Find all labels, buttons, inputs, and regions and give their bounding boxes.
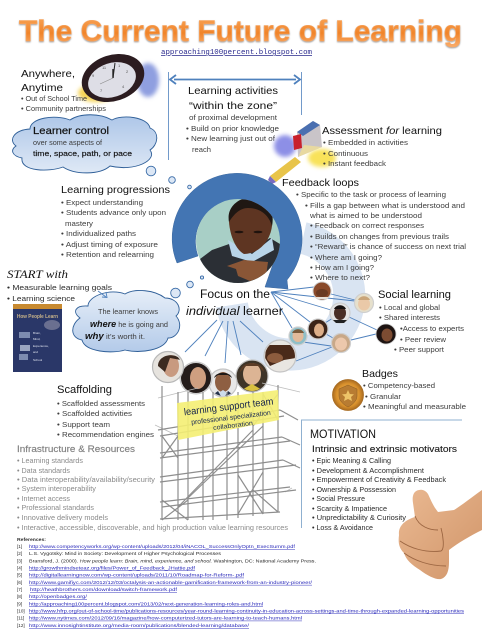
references: http://www.nytimes.com/2012/09/16/magazine/how-computerized-tutors-are-learning-to-teach-humans.html bbox=[29, 616, 302, 621]
text: social learning: •Access to experts bbox=[400, 324, 464, 333]
text: scaffolding: • Scaffolded activities bbox=[57, 409, 132, 418]
text: learning activities bbox=[186, 85, 279, 154]
references: [2] bbox=[17, 551, 22, 556]
references: [5] bbox=[17, 573, 22, 578]
text: focus on the individual learner: individual learner bbox=[186, 306, 283, 318]
text: social learning: Social learning bbox=[378, 289, 451, 301]
icon: book cover: School bbox=[33, 358, 43, 362]
text: learning activities: of proximal development bbox=[189, 113, 277, 122]
references: [11] bbox=[17, 616, 24, 621]
references: http://growthmindseteaz.org/files/Power_of_Feedback_JHattie.pdf bbox=[29, 566, 196, 570]
icon: book cover: Mind, bbox=[33, 337, 41, 341]
text: start with: START with bbox=[7, 267, 68, 281]
title: The Current Future of Learning bbox=[19, 15, 462, 48]
text: infrastructure and resources: • Internet access bbox=[17, 494, 70, 503]
references: [6] bbox=[17, 580, 22, 585]
text: learning activities: “within the zone” bbox=[189, 100, 278, 112]
references bbox=[17, 537, 465, 628]
icon: tape measure bbox=[268, 121, 336, 184]
references: http://www.innosightinstitute.org/media-room/publications/blended-learning/database/ bbox=[29, 623, 250, 628]
text: feedback loops bbox=[282, 177, 466, 282]
text: social learning bbox=[378, 289, 464, 354]
icon: clock: 11 bbox=[102, 65, 107, 70]
panel: motivation: MOTIVATION bbox=[310, 429, 376, 441]
text: infrastructure and resources bbox=[17, 444, 288, 532]
banner: learning support team bbox=[177, 390, 279, 440]
text: assessment for learning bbox=[322, 125, 442, 168]
text: badges: Badges bbox=[362, 368, 398, 380]
text: badges: • Competency-based bbox=[363, 381, 435, 390]
text: feedback loops: • Fills a gap between what is understood and bbox=[305, 201, 465, 210]
panel: motivation: • Ownership & Possession bbox=[312, 485, 396, 494]
photo: central learner bbox=[196, 197, 280, 283]
text: social learning: • Shared interests bbox=[379, 313, 440, 322]
banner: learning support team: professional specialization bbox=[191, 410, 271, 427]
text: scaffolding: • Scaffolded assessments bbox=[57, 399, 145, 408]
text: scaffolding: • Support team bbox=[57, 420, 110, 429]
text: social learning: • Local and global bbox=[379, 303, 440, 312]
text: anywhere anytime: Anytime bbox=[21, 82, 63, 94]
references: http://openbadges.org/ bbox=[29, 594, 88, 599]
icon: clock: 2 bbox=[126, 69, 129, 74]
icon: book cover: Brain, bbox=[33, 331, 41, 335]
banner: learning support team: collaboration bbox=[213, 420, 254, 432]
references: [7] bbox=[17, 587, 22, 592]
text: feedback loops: Feedback loops bbox=[282, 177, 359, 189]
icon: clock: 7 bbox=[100, 88, 103, 93]
panel: motivation: • Scarcity & Impatience bbox=[312, 504, 387, 513]
icon: badge bbox=[332, 380, 364, 410]
text: badges bbox=[362, 368, 466, 411]
cloud: learner knows: why it’s worth it. bbox=[85, 331, 145, 341]
text: assessment for learning: Assessment for learning bbox=[322, 125, 442, 137]
text: learning activities: reach bbox=[192, 145, 211, 154]
text: start with: • Learning science bbox=[7, 294, 75, 303]
text: start with bbox=[7, 267, 112, 303]
text: infrastructure and resources: • Innovative delivery models bbox=[17, 513, 108, 522]
text: anywhere anytime: • Out of School Time bbox=[21, 94, 87, 103]
text: learning progressions: • Adjust timing of exposure bbox=[61, 240, 158, 249]
text: learning activities: • Build on prior knowledge bbox=[186, 124, 279, 133]
text: anywhere anytime: Anywhere, bbox=[21, 68, 75, 80]
text: learning progressions bbox=[61, 184, 170, 259]
connector lines bbox=[185, 287, 377, 363]
text: learning progressions: mastery bbox=[65, 219, 93, 228]
references: http://www.hfrp.org/out-of-school-time/publications-resources/year-round-learning-continuity-in-education-across-settings-and-time-through-expanded-learning-opportunities bbox=[29, 608, 465, 614]
text: scaffolding: Scaffolding bbox=[57, 384, 112, 396]
references: [4] bbox=[17, 566, 22, 570]
double arrow: zone of proximal development bbox=[168, 72, 302, 160]
panel: motivation: • Development & Accomplishment bbox=[312, 466, 424, 475]
text: social learning: • Peer review bbox=[400, 335, 447, 344]
text: social learning: • Peer support bbox=[394, 345, 444, 354]
references: [3] bbox=[17, 558, 22, 563]
text: assessment for learning: • Instant feedback bbox=[323, 159, 386, 168]
text: infrastructure and resources: • Data interoperability/availability/security bbox=[17, 475, 155, 484]
text: feedback loops: • Feedback on correct responses bbox=[310, 221, 424, 230]
text: learning progressions: • Individualized paths bbox=[61, 229, 136, 238]
panel: motivation bbox=[302, 420, 462, 532]
references: http://digitallearningnow.com/wp-content/uploads/2011/10/Roadmap-for-Reform-.pdf bbox=[29, 573, 245, 578]
text: feedback loops: • “Reward” is chance of success on next trial bbox=[310, 242, 466, 251]
text: assessment for learning: • Embedded in activities bbox=[323, 138, 408, 147]
text: learning progressions: Learning progressions bbox=[61, 184, 170, 196]
references: [9] bbox=[17, 601, 22, 606]
references: Bransford, J. (2000). How people learn: Brain, mind, experience, and school. Washington, DC: National Academy Press. bbox=[29, 558, 316, 563]
cloud: learner control: over some aspects of bbox=[33, 138, 103, 147]
panel: motivation: • Epic Meaning & Calling bbox=[312, 456, 391, 465]
icon: clock bbox=[75, 46, 159, 110]
icon: book cover bbox=[13, 304, 62, 372]
text: feedback loops: what is aimed to be understood bbox=[309, 211, 422, 220]
text: infrastructure and resources: • Interactive, accessible, discoverable, and high production value learning resources bbox=[17, 523, 288, 532]
text: learning progressions: • Students advance only upon bbox=[61, 208, 166, 217]
blog url: approaching100percent.blogspot.com bbox=[161, 49, 312, 57]
text: feedback loops: • Where to next? bbox=[310, 273, 370, 282]
banner: learning support team: learning support team bbox=[183, 396, 274, 418]
cloud: learner control: time, space, path, or pace bbox=[33, 149, 132, 158]
icon: clock: 9 bbox=[92, 73, 95, 78]
text: learning activities: • New learning just out of bbox=[186, 134, 276, 143]
references: http://www.gamifiyc.com/2012/12/03/octalysis-an-actionable-gamification-framework-from-an-industry-pioneer/ bbox=[29, 580, 313, 585]
text: focus on the individual learner bbox=[186, 289, 283, 318]
text: infrastructure and resources: Infrastructure & Resources bbox=[17, 444, 136, 454]
icon: clock: 4 bbox=[122, 84, 125, 89]
panel: motivation: • Loss & Avoidance bbox=[312, 523, 373, 532]
references: [10] bbox=[17, 608, 25, 614]
references: L.S. Vygotsky: Mind in Society: Development of Higher Psychological Processes bbox=[29, 551, 222, 556]
cloud: learner knows: The learner knows bbox=[98, 307, 158, 316]
references: http://approaching100percent.blogspot.com/2013/02/next-generation-learning-roles-and.html bbox=[29, 601, 263, 606]
arrow: goals to cloud bbox=[98, 291, 107, 298]
thought bubbles: upper bbox=[146, 166, 191, 189]
scaffold structure bbox=[155, 383, 300, 520]
icon: clock: 1 bbox=[118, 63, 121, 68]
icon: thumbs up bbox=[399, 490, 482, 579]
cloud: learner control bbox=[12, 115, 157, 173]
references: [8] bbox=[17, 594, 22, 599]
text: badges: • Granular bbox=[365, 392, 402, 401]
text: infrastructure and resources: • System interoperability bbox=[17, 484, 96, 493]
icon: book cover: How People Learn bbox=[17, 314, 58, 320]
icon: book cover: Experience, bbox=[33, 344, 49, 348]
icon: book cover: and bbox=[33, 350, 38, 354]
text: feedback loops: • Where am I going? bbox=[310, 253, 382, 262]
text: infrastructure and resources: • Learning standards bbox=[17, 456, 83, 465]
cloud: learner knows: where he is going and bbox=[90, 319, 168, 329]
photos: learning support team bbox=[152, 340, 296, 398]
text: assessment for learning: • Continuous bbox=[323, 149, 368, 158]
photos: peer network bbox=[289, 282, 396, 352]
text: learning activities: Learning activities bbox=[188, 85, 278, 97]
text: scaffolding: • Recommendation engines bbox=[57, 430, 154, 439]
panel: motivation: • Empowerment of Creativity & Feedback bbox=[312, 475, 446, 484]
references: http://heathbrothers.com/download/switch-framework.pdf bbox=[30, 587, 178, 592]
pale swoosh behind the learner network bbox=[232, 238, 349, 355]
references: References: bbox=[17, 537, 46, 543]
text: learning progressions: • Retention and relearning bbox=[61, 250, 154, 259]
references: [1] bbox=[17, 544, 22, 549]
text: scaffolding bbox=[57, 384, 154, 439]
text: focus on the individual learner: Focus on the bbox=[200, 289, 270, 301]
panel: motivation: • Social Pressure bbox=[312, 494, 365, 503]
panel: motivation: • Unpredictability & Curiosity bbox=[312, 513, 406, 522]
circular arrow around learner bbox=[172, 173, 302, 289]
text: feedback loops: • Specific to the task or process of learning bbox=[296, 190, 446, 199]
text: anywhere anytime bbox=[21, 68, 106, 113]
panel: motivation: Intrinsic and extrinsic motivators bbox=[312, 444, 458, 454]
text: infrastructure and resources: • Professional standards bbox=[17, 503, 94, 512]
references: http://www.competencyworks.org/wp-content/uploads/2012/04/iNACOL_SuccessOnlyOptn_ExecSumm.pdf bbox=[29, 544, 296, 549]
cloud: learner knows bbox=[73, 291, 180, 352]
text: anywhere anytime: • Community partnerships bbox=[21, 104, 106, 113]
text: learning progressions: • Expect understanding bbox=[61, 198, 143, 207]
thought bubbles: lower bbox=[171, 276, 204, 298]
text: badges: • Meaningful and measurable bbox=[363, 402, 466, 411]
references: [12] bbox=[17, 623, 25, 628]
text: infrastructure and resources: • Data standards bbox=[17, 466, 70, 475]
text: feedback loops: • Builds on changes from previous trails bbox=[310, 232, 449, 241]
text: feedback loops: • How am I going? bbox=[310, 263, 374, 272]
text: start with: • Measurable learning goals bbox=[7, 283, 112, 292]
cloud: learner control: Learner control bbox=[33, 125, 109, 137]
